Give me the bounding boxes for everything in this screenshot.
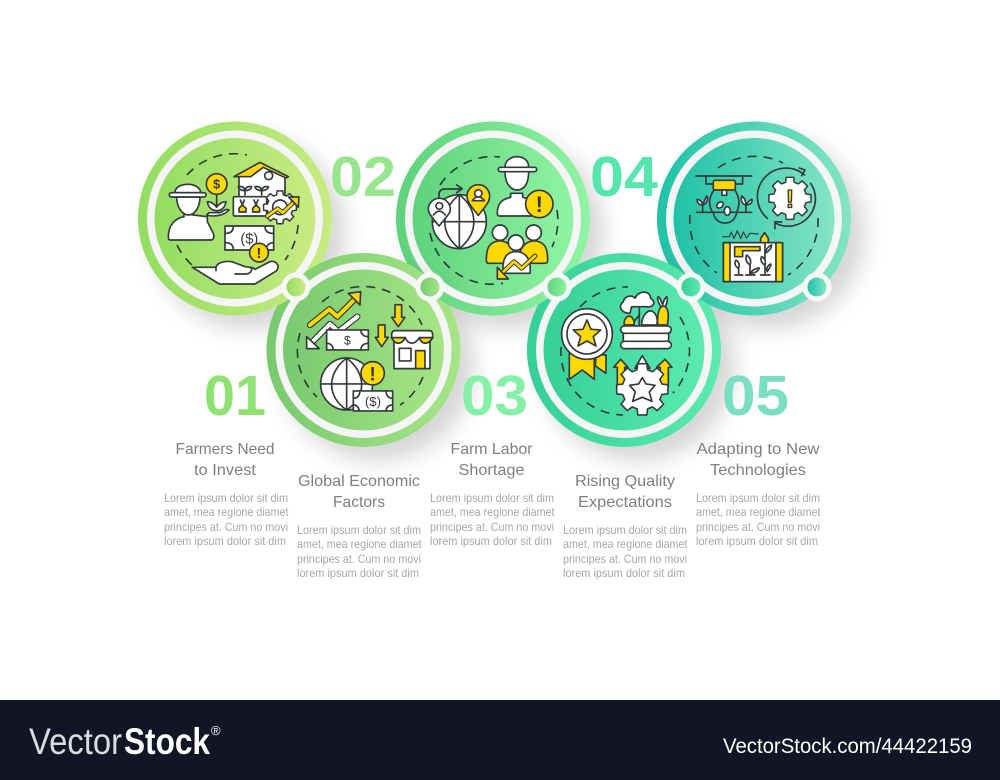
number 04: 04 xyxy=(590,145,658,209)
footer image id: VectorStock.com/44422159 xyxy=(723,735,972,758)
text block: farmers need to invest: Lorem ipsum dolor sit dim xyxy=(164,491,288,505)
text block: rising quality expectations: Rising Quality xyxy=(575,473,675,490)
text block: farmers need to invest: Farmers Need xyxy=(176,441,274,458)
text block: rising quality expectations: Expectations xyxy=(578,494,672,511)
text block: farm labor shortage: amet, mea regione diamet xyxy=(430,505,555,519)
text block: adapting to new technologies: Technologies xyxy=(710,462,806,479)
text block: farm labor shortage: Shortage xyxy=(458,462,525,479)
footer logo xyxy=(29,721,221,762)
text block: rising quality expectations: principes at. Cum no movi xyxy=(563,552,687,566)
text block: global economic factors: Factors xyxy=(333,494,385,511)
text block: global economic factors: principes at. Cum no movi xyxy=(297,552,421,566)
text block: adapting to new technologies xyxy=(696,441,821,548)
panel: step 2 circle, global economic factors xyxy=(266,253,460,447)
text block: global economic factors: amet, mea regione diamet xyxy=(297,537,422,551)
text block: farm labor shortage: Lorem ipsum dolor sit dim xyxy=(430,491,554,505)
icon: globe with pins, farmer, workers: ! xyxy=(536,192,543,217)
text block: farm labor shortage: principes at. Cum no movi xyxy=(430,520,554,534)
text block: rising quality expectations: amet, mea regione diamet xyxy=(563,537,688,551)
footer logo: Stock xyxy=(124,721,210,762)
panel: step 3 circle, farm labor shortage xyxy=(396,122,590,316)
text block: adapting to new technologies: lorem ipsum dolor sit dim xyxy=(696,534,818,548)
footer logo: ® xyxy=(211,723,221,738)
text block: global economic factors: Global Economic xyxy=(298,473,420,490)
footer bar xyxy=(0,700,1000,780)
icon: drone, gear and field plan xyxy=(696,168,815,282)
icon: globe with pins, farmer, workers xyxy=(428,157,553,279)
footer logo: Vector xyxy=(29,721,122,762)
text block: rising quality expectations xyxy=(563,473,688,580)
text block: global economic factors: Lorem ipsum dolor sit dim xyxy=(297,523,421,537)
panel: step 1 circle, farmers need to invest xyxy=(138,122,332,316)
icon: farmer, greenhouse, money and hand: ($) xyxy=(240,231,258,247)
panel: step 5 circle, adapting to new technologies xyxy=(657,122,851,316)
icon: farmer, greenhouse, money and hand xyxy=(168,162,299,284)
icon: drone, gear and field plan: ! xyxy=(786,186,794,214)
icon: trend arrows, store, globe and money: ! xyxy=(369,364,376,385)
text block: farmers need to invest: principes at. Cum no movi xyxy=(164,520,288,534)
connector dots xyxy=(282,272,832,302)
icon: trend arrows, store, globe and money xyxy=(307,292,433,411)
text block: adapting to new technologies: principes at. Cum no movi xyxy=(696,520,820,534)
text block: farm labor shortage: lorem ipsum dolor sit dim xyxy=(430,534,552,548)
interlocking ring overlaps xyxy=(238,280,748,314)
text block: farmers need to invest xyxy=(164,441,289,548)
text block: farm labor shortage: Farm Labor xyxy=(450,441,533,458)
panel: step 4 circle, rising quality expectations xyxy=(527,253,721,447)
text block: farm labor shortage xyxy=(430,441,555,548)
number 01: 01 xyxy=(204,364,266,428)
text block: farmers need to invest: amet, mea regione diamet xyxy=(164,505,289,519)
number 03: 03 xyxy=(461,364,528,428)
text block: global economic factors: lorem ipsum dolor sit dim xyxy=(297,566,419,580)
icon: medal, harvest basket, star gear xyxy=(562,292,672,415)
text block: rising quality expectations: lorem ipsum dolor sit dim xyxy=(563,566,685,580)
icon: farmer, greenhouse, money and hand: ! xyxy=(257,246,261,262)
number 05: 05 xyxy=(722,364,789,428)
text block: farmers need to invest: lorem ipsum dolor sit dim xyxy=(164,534,286,548)
text block: global economic factors xyxy=(297,473,422,580)
icon: trend arrows, store, globe and money: ($) xyxy=(365,394,381,409)
text block: adapting to new technologies: amet, mea regione diamet xyxy=(696,505,821,519)
text block: farmers need to invest: to Invest xyxy=(194,462,257,479)
number 02: 02 xyxy=(330,145,396,209)
icon: trend arrows, store, globe and money: $ xyxy=(344,333,351,347)
text block: adapting to new technologies: Lorem ipsum dolor sit dim xyxy=(696,491,820,505)
text block: adapting to new technologies: Adapting to New xyxy=(696,441,820,458)
text block: rising quality expectations: Lorem ipsum dolor sit dim xyxy=(563,523,687,537)
icon: farmer, greenhouse, money and hand: $ xyxy=(213,178,220,192)
